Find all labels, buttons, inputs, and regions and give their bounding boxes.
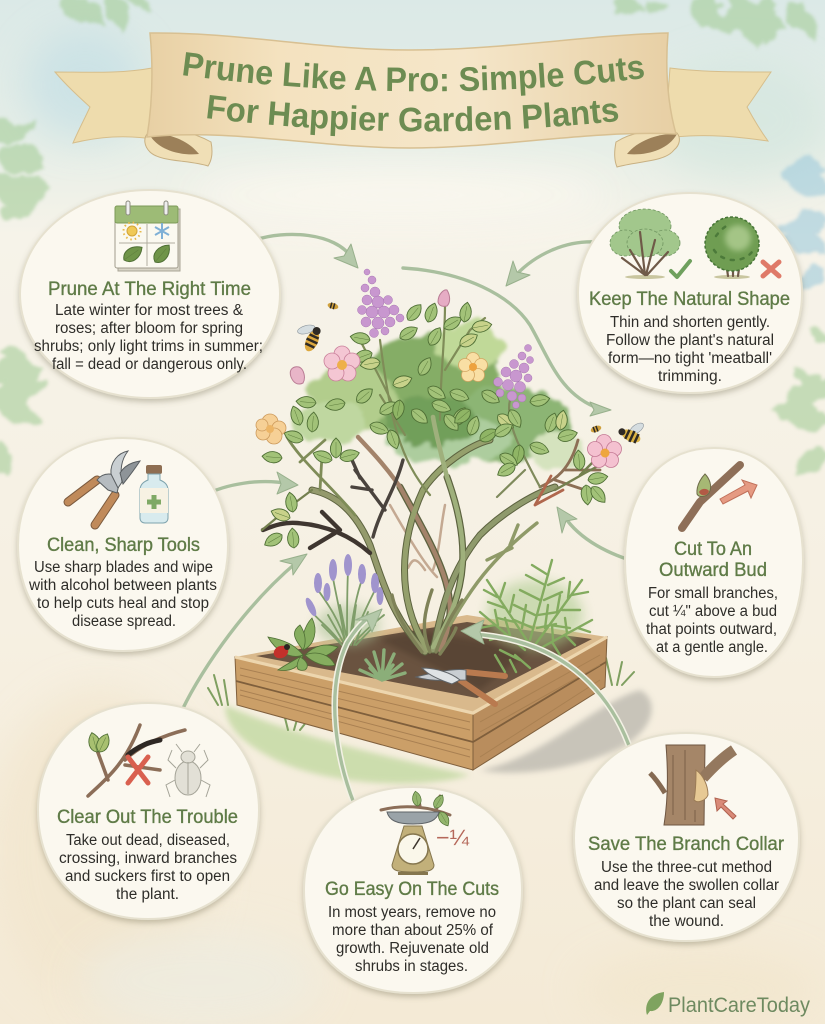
small herb [360, 650, 405, 680]
heading: Prune At The Right Time [48, 278, 251, 300]
panel: cut to an outward bud [625, 448, 803, 677]
icon: branch with bud [682, 465, 740, 528]
title text: For Happier Garden Plants [207, 95, 618, 136]
body text: shrubs in stages. [355, 958, 468, 975]
body text: cut ¼" above a bud [649, 603, 777, 620]
arrow: natural shape to plant [506, 242, 597, 286]
fern [480, 560, 592, 672]
body text: disease spread. [72, 613, 176, 630]
icon: diseased branch with cross [86, 725, 185, 796]
heading: Clear Out The Trouble [57, 806, 238, 828]
body text: roses; after bloom for spring [55, 320, 243, 337]
title text: Prune Like A Pro: Simple Cuts [183, 52, 644, 96]
arrow: tools to plant [203, 472, 298, 496]
body text: fall = dead or dangerous only. [52, 356, 247, 373]
ladybug and leafy herb [268, 618, 338, 670]
arrow: right time to plant [255, 234, 358, 268]
lilac clusters [358, 269, 534, 408]
body text: In most years, remove no [328, 904, 496, 921]
panel: save the branch collar [574, 733, 799, 941]
card shape [578, 193, 802, 393]
heading: Keep The Natural Shape [589, 288, 790, 310]
icon: natural shrub with check [610, 209, 690, 279]
banner tails [55, 68, 771, 167]
icon: trunk with branch collar [650, 745, 734, 825]
banner main ribbon [147, 33, 676, 148]
body text: Follow the plant's natural [606, 332, 774, 349]
body text: shrubs; only light trims in summer; [34, 338, 263, 355]
body text: at a gentle angle. [656, 639, 768, 656]
icon: kitchen scale with branch [381, 790, 452, 875]
body text: so the plant can seal [617, 895, 756, 912]
flowers [256, 290, 622, 468]
icon: clipped ball shrub with cross [705, 217, 779, 279]
body text: form—no tight 'meatball' [608, 350, 772, 367]
heading: Go Easy On The Cuts [325, 878, 499, 900]
panel: go easy on the cuts [304, 787, 522, 993]
icon: pruners [68, 451, 140, 525]
body text: and leave the swollen collar [594, 877, 779, 894]
foliage wash [292, 319, 584, 470]
heading line two: Outward Bud [659, 559, 767, 581]
body text: trimming. [658, 368, 722, 385]
body text [59, 832, 237, 903]
body text: Use sharp blades and wipe [34, 559, 213, 576]
central illustration: shrub in raised bed [208, 269, 652, 784]
icon: alcohol bottle [140, 465, 168, 523]
card shape [18, 438, 228, 651]
body text [606, 314, 774, 385]
heading: Cut To An [674, 538, 752, 560]
body text [594, 859, 779, 930]
raised wooden bed [235, 615, 607, 770]
body text: Late winter for most trees & [55, 302, 244, 319]
stems at base [392, 590, 462, 654]
body text: and suckers first to open [65, 868, 230, 885]
panel: clear out the trouble [38, 703, 259, 919]
body text: more than about 25% of [332, 922, 494, 939]
icon: outward arrow [720, 480, 757, 504]
body text: For small branches, [648, 585, 778, 602]
body text: growth. Rejuvenate old [336, 940, 489, 957]
arrow: go easy to plant [335, 609, 382, 813]
heading: Save The Branch Collar [588, 833, 784, 855]
arrow: collar to plant [461, 620, 633, 757]
body text: the plant. [116, 886, 179, 903]
icon: logo leaf [646, 992, 664, 1015]
body text [646, 585, 778, 656]
bees [290, 302, 648, 446]
card shape [574, 733, 799, 941]
panel: prune at the right time [20, 190, 280, 398]
branches [262, 305, 600, 652]
body text: Thin and shorten gently. [610, 314, 770, 331]
panel: clean, sharp tools [18, 438, 228, 651]
card shape [304, 787, 522, 993]
body text: Use the three-cut method [601, 859, 772, 876]
body text: with alcohol between plants [28, 577, 217, 594]
lavender [304, 554, 384, 645]
ground wash and shadow [208, 658, 652, 784]
arrow: outward bud to branch [557, 507, 640, 563]
corner foliage [0, 0, 825, 479]
title banner [54, 32, 772, 168]
body text: to help cuts heal and stop [37, 595, 209, 612]
card shape [625, 448, 803, 677]
icon: beetle [166, 744, 210, 797]
icon: seasonal calendar [115, 201, 180, 271]
pruners in bed [416, 668, 505, 704]
arrow: trouble to plant [179, 554, 307, 717]
logo: PlantCareToday [646, 992, 810, 1017]
body text [34, 302, 263, 373]
body text [328, 904, 496, 975]
panel: keep the natural shape [578, 193, 802, 393]
logo wordmark: PlantCareToday [668, 994, 810, 1017]
card shape [38, 703, 259, 919]
leaves [262, 301, 609, 550]
body text: that points outward, [646, 621, 777, 638]
body text [28, 559, 217, 630]
heading: Clean, Sharp Tools [47, 534, 200, 556]
body text: crossing, inward branches [59, 850, 237, 867]
body text: Take out dead, diseased, [66, 832, 230, 849]
arrows [179, 234, 640, 813]
icon label: minus one quarter: −¼ [436, 825, 470, 850]
title text [183, 52, 644, 136]
card shape [20, 190, 280, 398]
icon: collar arrow [715, 798, 736, 819]
arrow: long arrow to right flowers [403, 268, 611, 416]
body text: the wound. [649, 913, 724, 930]
